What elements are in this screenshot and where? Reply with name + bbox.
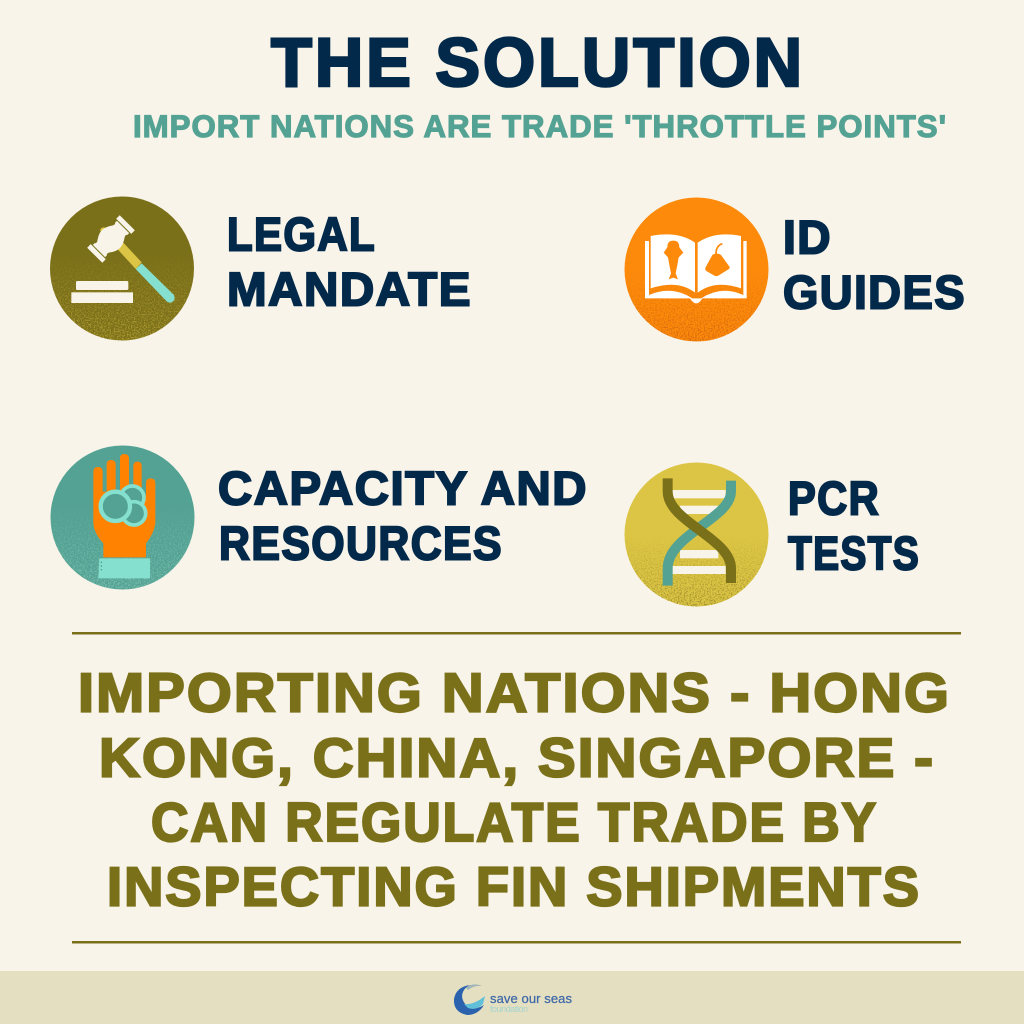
icon: book (624, 198, 768, 342)
label: capacity and resources: RESOURCES (219, 516, 503, 570)
statement text: KONG, CHINA, SINGAPORE - (99, 726, 935, 788)
label: pcr tests (788, 472, 920, 580)
logo: save our seas foundation (454, 984, 572, 1015)
label: pcr tests: PCR (788, 472, 880, 524)
footer band (0, 971, 1024, 1024)
icon: ray silhouette (705, 244, 730, 276)
label: legal mandate: LEGAL (227, 208, 376, 260)
label: pcr tests: TESTS (788, 526, 920, 580)
label: legal mandate (227, 208, 472, 316)
label: id guides (783, 210, 966, 318)
statement text: INSPECTING FIN SHIPMENTS (107, 856, 921, 918)
icon: hand with coins (50, 446, 194, 590)
logo: save our seas foundation: save our seas (490, 991, 572, 1006)
logo: save our seas foundation: foundation (490, 1004, 528, 1014)
title: THE SOLUTION (271, 24, 805, 101)
label: id guides: GUIDES (783, 266, 966, 318)
statement text (78, 662, 951, 918)
subtitle: IMPORT NATIONS ARE TRADE 'THROTTLE POINTS' (133, 108, 947, 144)
label: id guides: ID (783, 210, 832, 264)
label: capacity and resources (218, 462, 588, 570)
icon: dna helix (624, 462, 768, 606)
label: capacity and resources: CAPACITY AND (218, 462, 588, 514)
icon: gavel (50, 196, 194, 340)
icon: fish silhouette (664, 241, 683, 279)
statement text: CAN REGULATE TRADE BY (151, 791, 878, 853)
label: legal mandate: MANDATE (227, 262, 472, 316)
statement text: IMPORTING NATIONS - HONG (78, 662, 951, 724)
